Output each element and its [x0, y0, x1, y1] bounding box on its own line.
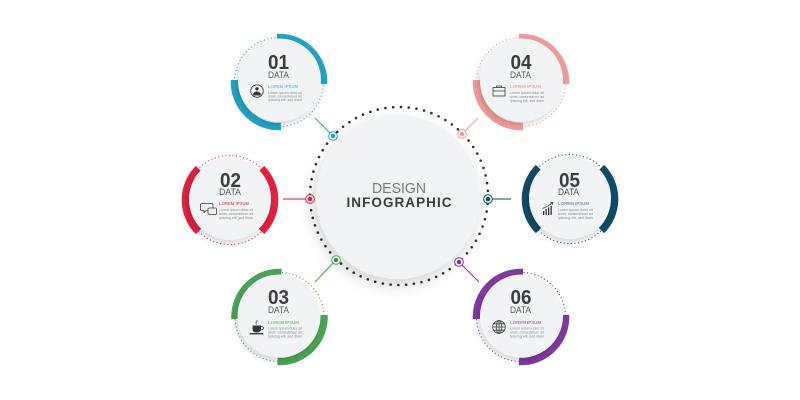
- icon: coffee cup: [250, 320, 264, 334]
- ring 06: [476, 272, 566, 362]
- text 06: ipiscing elit, sed diam: [510, 334, 544, 338]
- disc 06: [480, 274, 563, 358]
- disc 01: [238, 38, 321, 122]
- text 04: amet, consectetuer ad: [510, 94, 544, 99]
- text 02: ipiscing elit, sed diam: [219, 215, 253, 220]
- text 01: ipiscing elit, sed diam: [268, 97, 302, 102]
- text 03: LOREM IPSUM: [268, 320, 299, 325]
- panel: 05: [525, 154, 615, 244]
- central title: DESIGN: [372, 180, 426, 197]
- number 04: 04: [510, 52, 532, 74]
- text 01: amet, consectetuer ad: [268, 94, 302, 99]
- text 03: [268, 320, 303, 338]
- text 04: [510, 84, 545, 103]
- connector 05: [484, 195, 511, 203]
- text 01: LOREM IPSUM: [268, 84, 298, 89]
- number 01: 01: [268, 52, 289, 74]
- ring 05: [525, 154, 615, 244]
- central disc: [316, 115, 480, 279]
- central title: [346, 180, 452, 210]
- text 05: ipiscing elit, sed diam: [558, 215, 593, 220]
- connector 06: [455, 258, 479, 282]
- panel: 06: [476, 272, 566, 362]
- number 05: 05: [559, 170, 580, 192]
- icon: person: [251, 85, 263, 97]
- disc 04: [480, 38, 563, 122]
- text 05: amet, consectetuer ad: [558, 211, 593, 216]
- number 06: 06: [510, 287, 532, 309]
- text 06: Lorem ipsum dolor sit: [510, 326, 545, 330]
- icon: speech bubbles: [200, 204, 216, 214]
- text 02: Lorem ipsum dolor sit: [219, 207, 254, 212]
- text 05: LOREM IPSUM: [558, 201, 589, 206]
- text 01: [268, 84, 303, 102]
- ring 01: [234, 37, 324, 127]
- text 03: ipiscing elit, sed diam: [268, 334, 302, 338]
- icon: rising chart: [542, 202, 554, 215]
- panel: 01: [234, 37, 324, 127]
- text 03: amet, consectetuer ad: [268, 330, 302, 334]
- connector 04: [458, 118, 478, 138]
- text 06: LOREM IPSUM: [510, 320, 541, 325]
- ring 04: [476, 37, 566, 127]
- text 06: [510, 320, 545, 338]
- number 02: 02: [220, 170, 241, 192]
- label 04: DATA: [510, 70, 532, 81]
- label 05: DATA: [558, 187, 580, 198]
- panel: 02: [185, 156, 275, 244]
- ring 03: [235, 272, 324, 362]
- connector 02: [283, 195, 314, 203]
- connectors and nodes: [283, 118, 511, 282]
- text 02: amet, consectetuer ad: [219, 211, 253, 216]
- text 05: Lorem ipsum dolor sit: [558, 207, 594, 212]
- ring 02: [185, 156, 275, 244]
- label 01: DATA: [268, 70, 290, 81]
- number 03: 03: [268, 287, 289, 309]
- panel: 04: [476, 37, 566, 127]
- icon: globe: [493, 321, 505, 333]
- label 06: DATA: [510, 305, 532, 316]
- disc 02: [189, 158, 271, 240]
- icon: briefcase: [493, 86, 505, 96]
- text 02: [219, 201, 254, 220]
- connector 03: [315, 256, 340, 282]
- label 03: DATA: [268, 305, 290, 316]
- text 06: amet, consectetuer ad: [510, 330, 544, 334]
- text 05: [558, 201, 594, 220]
- label 02: DATA: [219, 187, 242, 198]
- panel: 03: [235, 272, 324, 362]
- text 03: Lorem ipsum dolor sit: [268, 326, 303, 330]
- disc 03: [238, 274, 320, 358]
- text 04: Lorem ipsum dolor sit: [510, 90, 545, 95]
- disc 05: [529, 157, 611, 239]
- text 04: ipiscing elit, sed diam: [510, 98, 544, 103]
- connector 01: [315, 118, 337, 140]
- text 01: Lorem ipsum dolor sit: [268, 90, 303, 95]
- central dotted ring: [310, 107, 488, 285]
- text 04: LOREM IPSUM: [510, 84, 541, 89]
- central title: INFOGRAPHIC: [346, 195, 452, 210]
- text 02: LOREM IPSUM: [219, 201, 249, 206]
